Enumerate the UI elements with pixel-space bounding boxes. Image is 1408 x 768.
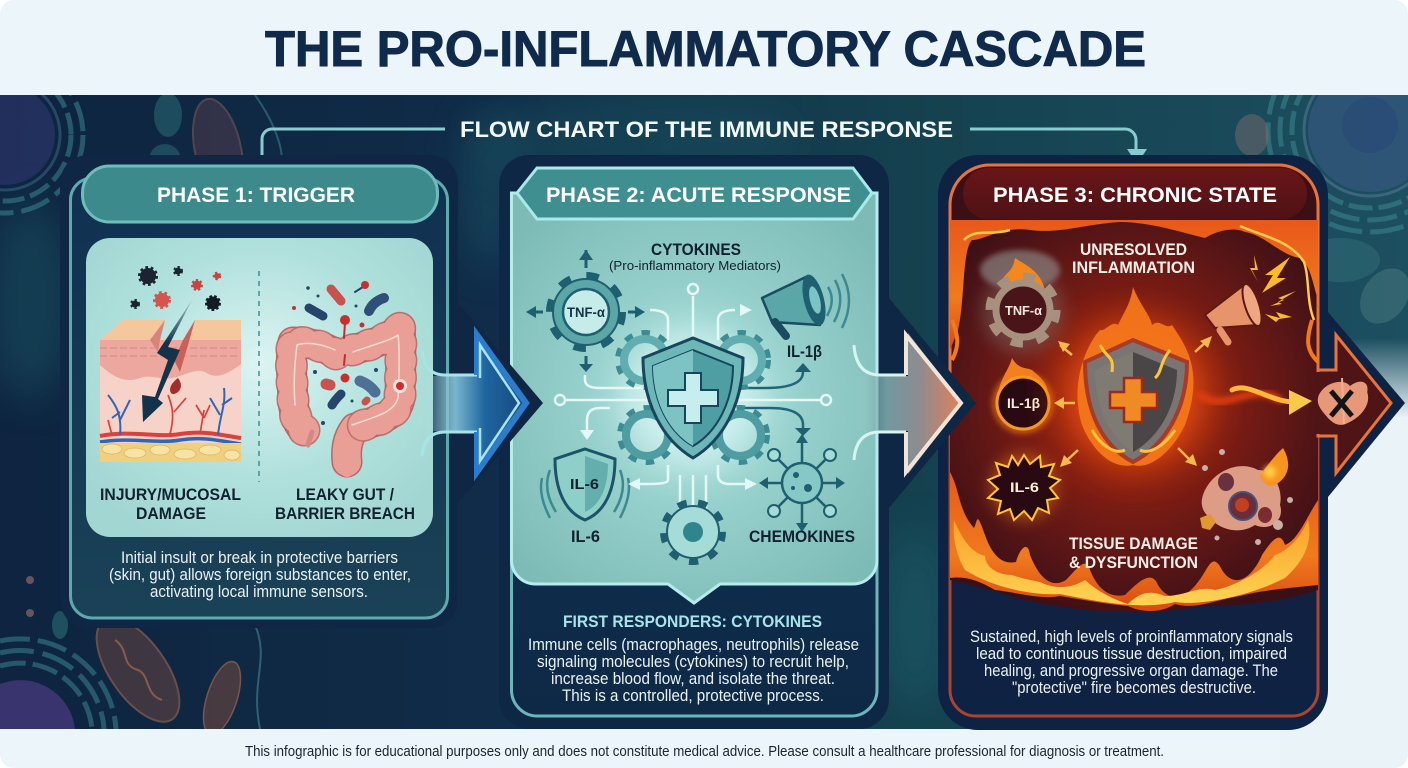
phase 1 description: activating local immune sensors. <box>150 583 368 601</box>
tissue damage label: TISSUE DAMAGE <box>1069 535 1198 553</box>
icon: il-1 beta megaphone <box>762 272 849 361</box>
phase 2 description <box>528 636 859 705</box>
phase 3 description: healing, and progressive organ damage. The <box>984 662 1278 680</box>
phase 2 description: This is a controlled, protective process. <box>562 687 824 705</box>
arrow: phase 3 to outcome <box>1200 312 1405 497</box>
tissue damage label <box>1069 535 1198 572</box>
header title: THE PRO-INFLAMMATORY CASCADE <box>265 21 1146 77</box>
illustration card <box>86 238 433 537</box>
labels: INJURY/MUCOSAL <box>100 486 241 504</box>
icon: bottom cell gear <box>664 503 722 561</box>
unresolved inflammation label: UNRESOLVED <box>1080 241 1187 259</box>
icon: central shield <box>643 338 743 458</box>
icon: lightning arrow <box>142 300 192 422</box>
icon: damaged organ <box>1317 378 1369 426</box>
phase 2 heading: PHASE 2: ACUTE RESPONSE <box>546 183 851 207</box>
chemokines label: CHEMOKINES <box>749 528 855 546</box>
subtitle: flow chart: FLOW CHART OF THE IMMUNE RESPONSE <box>460 117 953 142</box>
icon: il-6 burst <box>988 454 1060 520</box>
il-1 beta label: IL-1β <box>787 343 822 361</box>
flame arrows <box>1054 336 1212 467</box>
acute response light card <box>512 193 877 603</box>
icon: il-1 beta ring <box>992 358 1054 434</box>
icon: leaky gut <box>291 328 401 470</box>
phase 2 description: Immune cells (macrophages, neutrophils) release <box>528 636 859 654</box>
phase 3 description <box>970 628 1293 697</box>
phase 3 description: Sustained, high levels of proinflammatory signals <box>970 628 1293 646</box>
gears behind shield <box>619 334 767 461</box>
cytokines heading: CYTOKINES <box>651 241 741 259</box>
phase 2 description: increase blood flow, and isolate the threat. <box>551 670 835 688</box>
illustration card: LEAKY GUT / <box>296 486 394 504</box>
icon: destroyed cell <box>1200 448 1293 545</box>
phase 3 heading: PHASE 3: CHRONIC STATE <box>993 183 1277 207</box>
footer disclaimer: This infographic is for educational purposes only and does not constitute medical advice. Please consult a healthcare professional for diagnosis or treatment. <box>245 743 1164 760</box>
icon: burning tnf gear <box>980 250 1065 354</box>
phase 1 description <box>109 549 411 601</box>
phase 2 heading <box>517 168 872 219</box>
icon: il-6 shield <box>541 449 629 546</box>
icon: TNF-alpha gear <box>526 250 645 372</box>
glow <box>623 328 763 468</box>
phase 1 heading <box>82 166 438 222</box>
icon: pathogens <box>132 268 220 310</box>
phase 2 description: signaling molecules (cytokines) to recruit help, <box>537 653 849 671</box>
icon: burning shield <box>1063 287 1207 467</box>
arrow: phase 2 to phase 3 <box>854 298 976 508</box>
panel: phase 3 chronic state <box>938 155 1328 730</box>
icon: il-6 burst: IL-6 <box>1010 479 1039 495</box>
panel: phase 2 acute response <box>499 155 889 729</box>
icon: TNF-alpha gear: TNF-α <box>567 305 606 320</box>
cytokines heading <box>609 241 781 273</box>
icon: il-6 shield: IL-6 <box>570 476 599 493</box>
icon: burning tnf gear: TNF-α <box>1005 303 1042 318</box>
phase 3 description: "protective" fire becomes destructive. <box>1012 679 1256 697</box>
arrows in circuit <box>580 304 757 490</box>
arrow: phase 1 to phase 2 <box>422 303 543 503</box>
cytokines heading: (Pro-inflammatory Mediators) <box>609 258 781 273</box>
unresolved inflammation label: INFLAMMATION <box>1072 259 1195 277</box>
icon: damaged skin <box>100 320 241 462</box>
phase 3 description: lead to continuous tissue destruction, impaired <box>976 645 1287 663</box>
tissue damage label: & DYSFUNCTION <box>1069 554 1198 572</box>
phase 1 description: Initial insult or break in protective barriers <box>121 549 398 567</box>
flames border <box>950 220 1318 611</box>
phase 1 description: (skin, gut) allows foreign substances to enter, <box>109 566 411 584</box>
il-6 label: IL-6 <box>571 528 600 546</box>
icon: il-1 beta ring: IL-1β <box>1007 395 1040 411</box>
icon: burning megaphone <box>1205 255 1296 342</box>
light area lower right <box>1280 417 1408 768</box>
flowing fire arrow <box>1200 388 1312 415</box>
light fade behind right side <box>1280 338 1408 418</box>
icon: chemokines <box>749 434 855 546</box>
phase 3 heading <box>963 168 1307 219</box>
connector arrow to phase 3 <box>970 129 1147 164</box>
circuit lines <box>555 284 831 520</box>
fire field <box>950 165 1318 612</box>
bacteria <box>309 285 384 405</box>
unresolved inflammation label <box>1072 241 1195 277</box>
illustration card: DAMAGE <box>136 505 206 523</box>
illustration card: BARRIER BREACH <box>275 505 415 523</box>
panel: phase 1 trigger <box>60 155 458 628</box>
first responders heading: FIRST RESPONDERS: CYTOKINES <box>563 612 822 631</box>
phase 1 heading: PHASE 1: TRIGGER <box>157 183 355 207</box>
connector line to phase 1 <box>262 129 445 166</box>
